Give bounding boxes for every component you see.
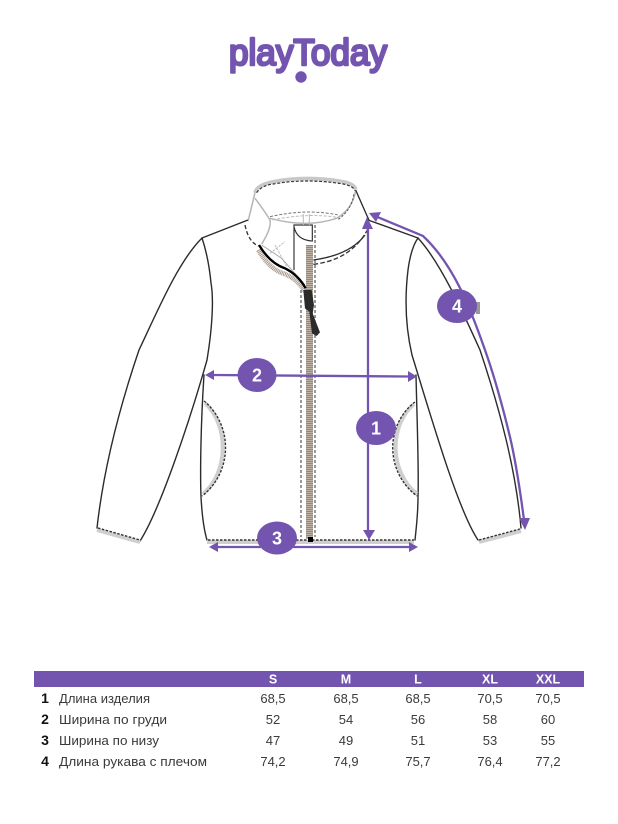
row 2: 60 <box>541 712 555 727</box>
row 1: 68,5 <box>405 691 431 706</box>
table header: M <box>341 672 351 686</box>
row 2: Ширина по груди <box>59 712 167 727</box>
collar and neckline <box>245 178 369 336</box>
zipper <box>301 225 315 542</box>
row 2: 56 <box>411 712 425 727</box>
row 4: 74,9 <box>333 754 359 769</box>
row 1: 1 <box>41 690 49 706</box>
arrow 3: hem width: 3 <box>272 528 282 548</box>
arrow 4: sleeve length <box>369 212 530 530</box>
arrow 4: sleeve length: 4 <box>452 296 462 316</box>
row 3: 47 <box>266 733 280 748</box>
row 4: 75,7 <box>405 754 431 769</box>
right cuff <box>479 529 521 542</box>
row 1: 70,5 <box>477 691 503 706</box>
row 2: 2 <box>41 711 49 727</box>
row 4 <box>41 753 561 769</box>
arrow 1: length: 1 <box>371 418 381 438</box>
right pocket <box>393 402 417 496</box>
table header: L <box>414 672 422 686</box>
table header: XL <box>482 672 498 686</box>
row 3: 51 <box>411 733 425 748</box>
row 4: 74,2 <box>260 754 286 769</box>
logo: playToday: playToday <box>229 32 387 73</box>
row 3: 3 <box>41 732 49 748</box>
row 4: 77,2 <box>535 754 561 769</box>
jacket body <box>201 375 418 540</box>
right sleeve <box>406 238 521 540</box>
row 2: 52 <box>266 712 280 727</box>
row 3: 55 <box>541 733 555 748</box>
row 1: Длина изделия <box>59 691 150 706</box>
row 1: 68,5 <box>260 691 286 706</box>
row 4: Длина рукава с плечом <box>59 754 207 769</box>
row 3 <box>41 732 555 748</box>
row 1 <box>41 690 561 706</box>
hem <box>207 540 414 542</box>
row 2: 54 <box>339 712 353 727</box>
left sleeve <box>97 238 212 541</box>
row 1: 68,5 <box>333 691 359 706</box>
arrow 3: hem width <box>209 522 418 554</box>
arrow 1: length <box>356 217 396 540</box>
row 3: Ширина по низу <box>59 733 160 748</box>
jacket technical drawing <box>97 178 521 542</box>
table header: S <box>269 672 277 686</box>
arrow 2: chest width <box>205 358 417 392</box>
zipper pull <box>303 290 320 336</box>
row 4: 76,4 <box>477 754 503 769</box>
row 2: 58 <box>483 712 497 727</box>
row 3: 53 <box>483 733 497 748</box>
arrow 2: chest width: 2 <box>252 366 262 386</box>
row 4: 4 <box>41 753 49 769</box>
row 3: 49 <box>339 733 353 748</box>
left cuff <box>97 528 140 542</box>
left pocket <box>202 401 226 496</box>
table header: XXL <box>536 672 561 686</box>
shoulders <box>202 220 418 238</box>
row 1: 70,5 <box>535 691 561 706</box>
table header <box>34 671 584 687</box>
row 2 <box>41 711 555 727</box>
size table <box>34 671 584 769</box>
